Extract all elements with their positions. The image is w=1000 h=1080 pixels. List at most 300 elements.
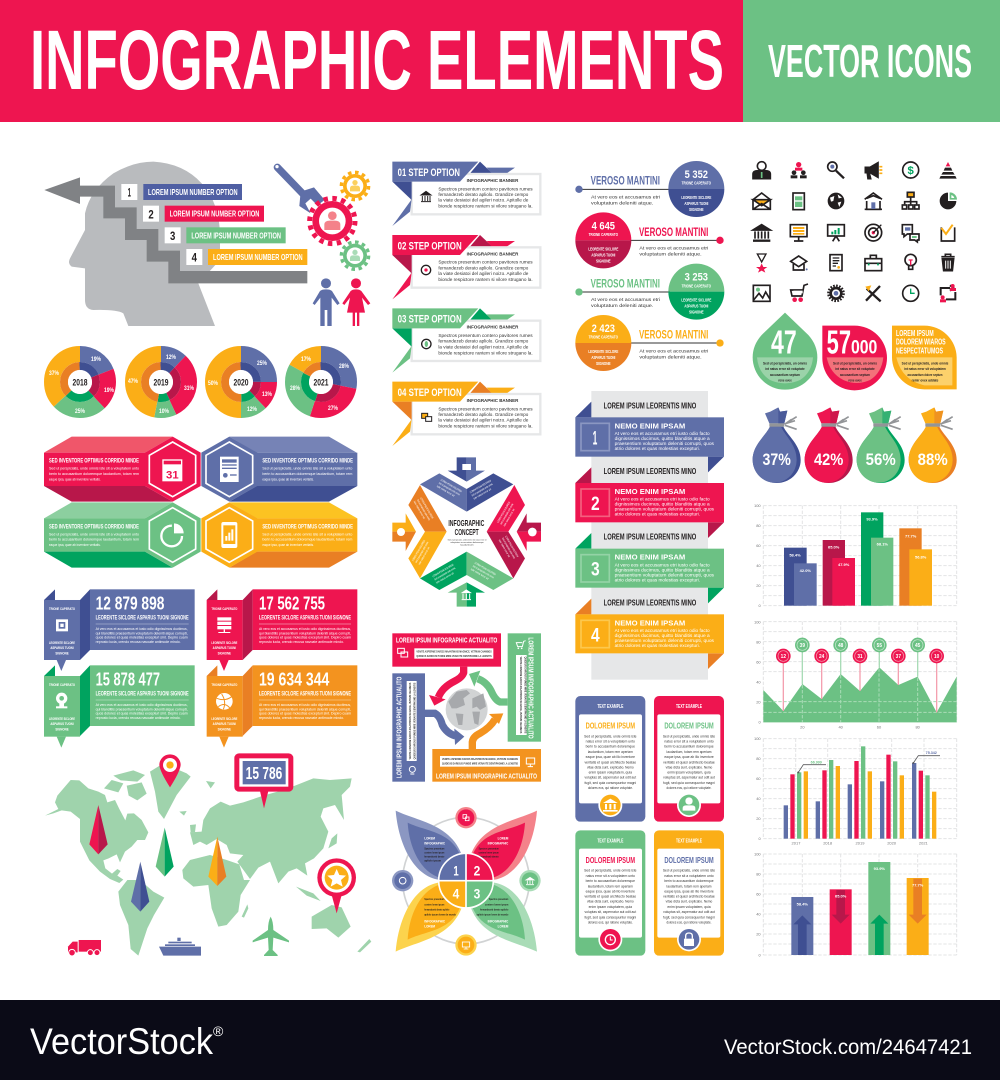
petal: red: INFOGRAPHIC xyxy=(488,840,508,845)
chart: area with pins: 12 xyxy=(781,654,786,660)
icon: megaphone xyxy=(865,163,882,179)
icon: medal xyxy=(756,254,767,273)
chart: grouped bars by year: 2019 xyxy=(856,841,865,846)
card: yellow: vitae dicta sunt, explicabo. Nemo xyxy=(666,900,712,904)
callout: 15 786: 15 786 xyxy=(246,763,283,783)
card: blue: Sed ut perspiciatis, unde omnis iste xyxy=(584,734,637,738)
number block: blue 12 879 898: qui blanditiis praesentium voluptatum deleniti atque corrupti, xyxy=(96,631,188,635)
step 3: bionde respictore rantem si vilore strugano la. xyxy=(438,350,533,355)
petal: red: fernandezeb derato xyxy=(479,854,499,858)
ribbon 1: atrio dolores et quas molestias excepturi. xyxy=(615,446,700,451)
card: red: natus error sit a voluptatem unto xyxy=(664,740,714,744)
arrow: staircase xyxy=(44,177,307,283)
step 2: bionde respictore rantem si vilore strugano la. xyxy=(438,277,533,282)
number block: orange 19 634 344: quos dolores et quas molestias excepturi sint. Depiro cuam xyxy=(259,712,351,716)
ribbon 1: praesentium voluptatum deleniti corrupti, quos xyxy=(615,441,715,446)
ribbon 3: atrio dolores et quas molestias excepturi. xyxy=(615,577,700,582)
number block: red 17 562 755: LEORENTE SICLORE ASPARUS TUONI SIGNONE xyxy=(259,615,351,621)
card: green: enim ipsam voluptatem, quia xyxy=(589,905,632,909)
drop: 47: rone ovex xyxy=(778,378,792,383)
drop: yellow text: accusantium dolore septum xyxy=(907,372,943,377)
icon: target xyxy=(865,224,882,241)
chart: 2019 donut: 2019 xyxy=(154,378,168,388)
panel: flow orange bottom: LOREM IPSUM INFOGRAPHIC ACTUALITO xyxy=(436,771,537,780)
chart: area with pins: 100 xyxy=(754,619,761,624)
segment: right red pair: iste natus error sit xyxy=(498,538,511,558)
option 3: 3 xyxy=(170,229,176,243)
hex banner: green pie: SED INVENTORE OPTIMUS CORRIDO MINDE xyxy=(49,524,139,530)
chart: overlapping bars and area chart xyxy=(754,503,957,729)
number block: green 15 878 477: qui blanditiis praesentium voluptatum deleniti atque corrupti, xyxy=(96,707,188,711)
icon: checkbox xyxy=(941,225,955,241)
card: green: DOLOREM IPSUM xyxy=(586,855,635,865)
number block: blue 12 879 898: SIGNONE xyxy=(55,650,69,655)
option 1 xyxy=(121,184,242,200)
bag: 37%: 37% xyxy=(762,450,791,469)
icon: blue node xyxy=(392,870,413,891)
option 3 xyxy=(165,227,286,243)
card: green: laudantium, totam rem aperiam xyxy=(588,884,633,888)
petal: blue: apliolo ipsum xyxy=(424,858,441,862)
icon: green node xyxy=(519,870,541,891)
chart: 2018 donut: 19% xyxy=(91,357,102,363)
card: blue: berin to accusantium doloremque xyxy=(586,745,635,749)
card: red: fugit, sed quia consequuntur magni xyxy=(663,781,715,785)
icon: globe xyxy=(828,193,844,209)
panel: icon grid, drops and bags xyxy=(753,162,957,483)
center: quadrant numbers: 4 xyxy=(453,886,460,902)
number block: orange 19 634 344: LEORENTE SICLORE ASPARUS TUONI SIGNONE xyxy=(259,691,351,697)
panel: flow green right: VENITE ASPERNIE DARCIS MAANTINUIS MAGNICE, VETRUM CHAMBOS xyxy=(519,657,523,733)
step 1: Spectros presentum contero pavitores rumes xyxy=(438,186,533,191)
number block: green 15 878 477: quos dolores et quas molestias excepturi sint. Depiro cuam xyxy=(96,712,188,716)
step 4: la viate desiatoi del agileri noizo. Apitolle de xyxy=(438,418,529,423)
step 3: Spectros presentum contero pavitores rumes xyxy=(438,333,533,338)
step 1 xyxy=(392,162,540,226)
step 2 xyxy=(392,235,540,299)
drop: yellow text: LOREM IPSUM xyxy=(896,329,934,338)
number block: green 15 878 477: ASPARUS TUONI xyxy=(50,721,74,726)
card: red: dolores eos, qui ratione voluptate. xyxy=(666,786,712,790)
icon: globe xyxy=(446,688,488,730)
petal: yellow xyxy=(396,882,466,952)
card: blue: veritatis et quasi architecto beatae xyxy=(584,760,636,764)
segment: right red pair: iste natus error sit xyxy=(502,508,516,527)
card: green: berin to accusantium doloremque xyxy=(586,879,635,883)
segment: left orange pair: Sed ut perspiciatis unde omnis xyxy=(414,541,430,564)
chart: area with pins: 31 xyxy=(857,654,863,660)
icon: house xyxy=(865,193,882,209)
chart: overlapping bars: 60 xyxy=(756,543,761,548)
chart: 2019 donut: 31% xyxy=(184,386,195,392)
card: yellow: fugit, sed quia consequuntur magni xyxy=(663,915,715,919)
number block: blue 12 879 898: LEORENTE SICLORE ASPARUS TUONI SIGNONE xyxy=(96,615,189,621)
icon: trash xyxy=(941,254,955,271)
chart: grouped bars by year: 2020 xyxy=(887,841,897,846)
segment: top blue pair xyxy=(420,473,513,512)
number block: red 17 562 755: TRIONE CAPERATO xyxy=(211,606,237,611)
icon: bank xyxy=(753,225,770,241)
segment: top blue pair: iste natus error sit xyxy=(472,487,492,501)
ribbon 1: At vero eos et accusamus etri iusto odio facto xyxy=(615,431,710,436)
card: red: TEXT EXAMPLE xyxy=(676,704,702,710)
segment: top blue pair: LOREM IPSUM DOLOREM xyxy=(440,478,463,493)
card: green: fugit, sed quia consequuntur magni xyxy=(584,915,636,919)
segment: left orange pair: iste natus error sit xyxy=(413,500,426,520)
number block: red 17 562 755: LEORENTE SICLORE xyxy=(211,640,238,645)
item: 2 423: TRIONE CAPERATO xyxy=(589,335,618,340)
ribbon 2: LOREM IPSUM LEORENTIS MINO xyxy=(604,466,697,476)
card: yellow: enim ipsam voluptatem, quia xyxy=(667,905,711,909)
icon: pyramid xyxy=(939,162,957,179)
panel: flow orange bottom xyxy=(432,749,541,782)
pin: blue kite xyxy=(131,862,149,912)
number block: orange 19 634 344: ASPARUS TUONI xyxy=(213,721,236,726)
icon: magnifier xyxy=(828,162,844,178)
step 2: INFOGRAPHIC BANNER xyxy=(467,251,519,256)
card: blue: enim ipsam voluptatem, quia xyxy=(589,771,632,775)
center: quadrant numbers: 2 xyxy=(474,862,481,878)
number block: red 17 562 755: 17 562 755 xyxy=(259,592,325,613)
icon: chat xyxy=(902,225,919,242)
chart: 2020 donut: 12% xyxy=(247,407,258,413)
segment: top blue pair: iste natus error sit xyxy=(436,484,456,498)
segment: bottom green pair: LOREM IPSUM DOLOREM xyxy=(431,563,454,578)
petal: yellow: apliolo ipsum lorem de mundo xyxy=(424,912,456,916)
bag: 37% xyxy=(753,407,801,483)
item: 5 352: LEORENTE SICLORE xyxy=(681,195,711,200)
chart: bars with arrows: 20 xyxy=(756,931,761,936)
number block: red 17 562 755: quos dolores et quas molestias excepturi sint. Depiro cuam xyxy=(259,636,351,640)
chart: 2020 donut: 25% xyxy=(257,361,268,367)
card: green: voluptas sit, aspernatur aut odit aut xyxy=(584,910,636,914)
map: continents xyxy=(45,763,371,956)
chart: grouped bars by year: 2018 xyxy=(823,841,833,846)
chart: area with pins: 48 xyxy=(838,643,843,649)
petal: red: Spectros presentum xyxy=(479,846,499,850)
chart: area with pins: 60 xyxy=(877,724,882,729)
segment: top blue pair: LOREM IPSUM DOLOREM xyxy=(469,479,492,494)
petal: green xyxy=(467,882,537,952)
hex banner: red calendar: berin to accusantium doloremque laudantium, totam rem xyxy=(49,472,139,476)
chart: area with pins: 39 xyxy=(800,643,805,649)
step 2: Spectros presentum contero pavitores rumes xyxy=(438,260,533,265)
chart: 2020 donut: 13% xyxy=(262,392,273,398)
number block: blue 12 879 898: LEORENTE SICLORE xyxy=(49,640,75,645)
icon: dollar: $ xyxy=(908,165,915,177)
chart: bars with arrows: 58.4% xyxy=(797,901,808,906)
segment: left orange pair: LOREM IPSUM DOLOREM xyxy=(411,539,426,562)
chart: 2019 donut: 12% xyxy=(166,355,177,361)
chart: 2018 donut xyxy=(49,354,115,415)
number block: blue 12 879 898 xyxy=(44,589,195,671)
icon: team xyxy=(791,162,807,178)
petal: blue: INFOGRAPHIC xyxy=(424,840,445,845)
step 3: INFOGRAPHIC BANNER xyxy=(467,325,519,330)
ribbon 1: 1 xyxy=(593,428,597,449)
number block: green 15 878 477: At vero eos et accusamus et iusto odio dignissimos ductimus, xyxy=(96,703,188,707)
ribbon 3: praesentium voluptatum deleniti corrupti, quos xyxy=(615,572,715,577)
card: yellow: natus error sit a voluptatem unto xyxy=(664,874,714,878)
icon: truck xyxy=(68,940,101,956)
item: 4 645 xyxy=(575,212,724,268)
heading: infographic concept: INFOGRAPHIC xyxy=(448,518,485,528)
segment: top blue pair: Sed ut perspiciatis unde omnis xyxy=(471,482,494,497)
hex banner: yellow phone: berin to accusantium doloremque laudantium, totam rem xyxy=(262,538,353,542)
chart: bars with arrows: 100 xyxy=(754,851,761,856)
chart: bars with arrows: 65.0% xyxy=(835,894,847,899)
step 4: bionde respictore rantem si vilore strugano la. xyxy=(438,424,533,429)
item: 5 352: SIGNONE xyxy=(689,207,704,212)
ribbon 1: dignissimos ducimus, quitto blanditis atque a xyxy=(615,436,710,441)
heading: infographic concept: CONCEPT xyxy=(455,527,479,537)
ribbon 2: atrio dolores et quas molestias excepturi. xyxy=(615,512,700,517)
segment: bottom green pair: Sed ut perspiciatis unde omnis xyxy=(433,566,456,581)
card: yellow: berin to accusantium doloremque xyxy=(664,879,714,883)
hex banner: red calendar: Sed ut perspiciatis, unde omnis iste sit a voluptatem unto xyxy=(49,467,139,471)
drop: 57 000: accusantium septum xyxy=(840,372,870,377)
arrow: green curved xyxy=(469,671,508,702)
pin: star location marker xyxy=(317,858,356,913)
chart: 2018 donut: 25% xyxy=(75,409,86,415)
panel: numbered ribbons xyxy=(575,391,724,680)
card: blue xyxy=(575,696,645,822)
petal: blue: Spectros presentum xyxy=(424,846,445,850)
step 2: 02 STEP OPTION xyxy=(398,240,462,252)
heading: infographic concept: voluptatem accusantium doloremque xyxy=(450,541,485,544)
icon: gear xyxy=(828,286,844,301)
card: yellow: Sed ut perspiciatis, unde omnis iste xyxy=(663,869,715,873)
icon: presentation xyxy=(828,225,844,241)
chart: overlapping bars xyxy=(754,503,957,608)
icon: image xyxy=(753,285,770,301)
petal: red: contero lorem ipsum xyxy=(479,850,499,854)
number block: green 15 878 477: 15 878 477 xyxy=(96,668,160,689)
segment: left orange pair: iste natus error sit xyxy=(417,546,431,565)
hex banner: yellow phone xyxy=(201,502,357,568)
chart: grouped bars by year xyxy=(754,736,957,846)
chart: bars with arrows: 93.9% xyxy=(874,866,885,871)
number block: orange 19 634 344 xyxy=(207,665,357,748)
item: 3 253: At vero eos et accusamus etri xyxy=(591,297,660,303)
step 1: bionde respictore rantem si vilore strugano la. xyxy=(438,204,533,209)
chart: grouped bars by year: 2021 xyxy=(919,841,929,846)
petal: blue: LOREM xyxy=(424,835,436,840)
segment: right red pair xyxy=(487,485,525,578)
option 2: 2 xyxy=(148,207,154,221)
item: 4 645: voluptatum deleniti atque. xyxy=(639,252,702,258)
petal: red xyxy=(467,811,537,880)
card: red: vitae dicta sunt, explicabo. Nemo xyxy=(666,765,712,769)
hex banner: red calendar: 31 xyxy=(166,470,179,482)
item: 2 423: At vero eos et accusamus etri xyxy=(639,348,708,354)
segment: bottom green pair: LOREM IPSUM DOLOREM xyxy=(474,561,497,576)
chart: grouped bars by year: 66.999 xyxy=(811,760,822,764)
ribbon 3: dignissimos ducimus, quitto blanditis atque a xyxy=(615,567,710,572)
item: 4 645: TRIONE CAPERATO xyxy=(589,232,618,237)
ribbon 2 xyxy=(575,466,724,538)
option 1: LOREM IPSUM NUMBER OPTION xyxy=(148,187,238,197)
step 1: 01 STEP OPTION xyxy=(398,167,460,179)
item: 5 352: ASPARUS TUONI xyxy=(684,201,708,206)
card: red: laudantium, totam rem aperiam xyxy=(666,750,712,754)
chart: overlapping bars: 56.8% xyxy=(915,554,927,559)
footer: watermark bar: ® xyxy=(213,1023,224,1039)
chart: area with pins: 80 xyxy=(756,639,761,644)
chart: bars with arrows: 0 xyxy=(758,952,761,957)
drop: 57 000 xyxy=(822,324,887,390)
item: 5 352: TRIONE CAPERATO xyxy=(682,181,711,186)
panel: hexagon banners and number blocks xyxy=(44,437,357,748)
chart: grouped bars and arrow bars xyxy=(754,736,957,957)
chart: overlapping bars: 42.0% xyxy=(800,568,811,573)
option 4: LOREM IPSUM NUMBER OPTION xyxy=(213,252,303,262)
card: red: enim ipsam voluptatem, quia xyxy=(667,771,711,775)
item: 3 253 xyxy=(575,264,724,320)
chart: overlapping bars: 40 xyxy=(756,563,761,568)
ring xyxy=(403,817,529,944)
icon: document xyxy=(830,255,842,271)
ribbon 2: praesentium voluptatum deleniti corrupti, quos xyxy=(615,507,715,512)
chart: overlapping bars: 20 xyxy=(756,583,761,588)
bag: 42% xyxy=(805,407,853,483)
number block: red 17 562 755: SIGNONE xyxy=(218,650,231,655)
footer: watermark bar: VectorStock.com/24647421 xyxy=(724,1036,972,1059)
pin: north location marker xyxy=(159,754,181,787)
number block: green 15 878 477 xyxy=(44,665,195,748)
ribbon 3: 3 xyxy=(591,560,600,581)
card: green: TEXT EXAMPLE xyxy=(597,838,624,844)
segment: bottom green pair xyxy=(420,552,513,590)
step 4: fernandezeb derato apliolo. Grandize cempo xyxy=(438,412,529,417)
ribbon 2: NEMO ENIM IPSAM xyxy=(615,489,686,496)
hex banner: blue document: eaque ipsa, quae ab inventore veritatis. xyxy=(262,477,314,481)
icon: wrench xyxy=(275,165,325,213)
card: yellow: veritatis et quasi architecto beatae xyxy=(663,895,715,899)
number block: green 15 878 477: SIGNONE xyxy=(55,726,69,731)
ribbon 4: atrio dolores et quas molestias excepturi. xyxy=(615,643,700,648)
chart: area with pins: 40 xyxy=(838,724,844,729)
hex banner: blue document xyxy=(201,437,357,502)
chart: area with pins: 55 xyxy=(877,643,882,649)
chart: 2018 donut: 2018 xyxy=(72,378,88,388)
icon: clock xyxy=(903,285,919,301)
arrow: bottom green xyxy=(448,582,485,607)
petal: green: contero lorem ipsum xyxy=(485,902,509,906)
hex banner: red calendar: eaque ipsa, quae ab inventore veritatis. xyxy=(49,477,101,481)
item: 2 423: 2 423 xyxy=(592,323,615,335)
chart: overlapping bars: 100 xyxy=(754,503,761,508)
petal: green: apliolo ipsum lorem de mundo xyxy=(477,912,508,916)
chart: grouped bars by year: 40 xyxy=(756,796,761,801)
panel: flower diagram xyxy=(392,807,541,956)
hex banner: yellow phone: SED INVENTORE OPTIMUS CORRIDO MINDE xyxy=(262,524,353,530)
chart: 2021 donut: 28% xyxy=(339,364,350,370)
number block: red 17 562 755: At vero eos et accusamus et iusto odio dignissimos ductimus, xyxy=(259,627,351,631)
icon: exchange xyxy=(940,284,956,302)
icon: man xyxy=(313,278,340,326)
chart: 2018 donut: 37% xyxy=(49,371,60,377)
icon: monitor xyxy=(790,225,807,241)
number block: orange 19 634 344: TRIONE CAPERATO xyxy=(211,682,237,687)
segment: top blue pair: Sed ut perspiciatis unde omnis xyxy=(438,481,461,497)
number block: red 17 562 755 xyxy=(207,589,357,671)
bag: 56% xyxy=(857,407,905,483)
ribbon 4: praesentium voluptatum deleniti corrupti, quos xyxy=(615,638,715,643)
ribbon 3: LOREM IPSUM LEORENTIS MINO xyxy=(604,532,697,542)
center: quadrant numbers: 1 xyxy=(453,862,459,878)
drop: 47: accusantium septum xyxy=(770,372,800,377)
petal: yellow: INFOGRAPHIC xyxy=(424,918,445,923)
panel: text example cards xyxy=(575,696,724,956)
chart: 2020 donut: 2020 xyxy=(234,378,248,388)
card: blue: vitae dicta sunt, explicabo. Nemo xyxy=(587,765,634,769)
card: blue: dolores eos, qui ratione voluptate. xyxy=(588,786,633,790)
item: 3 253: TRIONE CAPERATO xyxy=(682,283,711,288)
pin: orange kite xyxy=(208,837,226,886)
bag: 88%: 88% xyxy=(918,450,948,469)
chart: area with pins: 20 xyxy=(800,724,805,729)
card: green xyxy=(575,830,645,956)
header: title banner xyxy=(0,0,1000,122)
option 1: 1 xyxy=(128,186,131,200)
card: yellow: DOLOREM IPSUM xyxy=(664,855,714,865)
item: 5 352: VEROSO MANTINI xyxy=(591,174,660,188)
chart: 2021 donut xyxy=(290,354,350,412)
item: 5 352: voluptatum deleniti atque. xyxy=(591,200,653,206)
heading: infographic concept xyxy=(448,518,487,547)
icon: bulb xyxy=(905,254,916,269)
chart: area with pins: 40 xyxy=(756,679,761,684)
hex banner: blue document: SED INVENTORE OPTIMUS CORRIDO MINDE xyxy=(262,459,353,465)
hex banner: green pie: Sed ut perspiciatis, unde omnis iste sit a voluptatem unto xyxy=(49,532,139,536)
drop: yellow text: Sed ut perspiciatis, unde omnis xyxy=(902,360,949,365)
icon: woman xyxy=(342,278,370,326)
drop: 47: 47 xyxy=(771,324,797,361)
number block: orange 19 634 344: LEORENTE SICLORE xyxy=(211,716,238,721)
item: 4 645: At vero eos et accusamus etri xyxy=(639,246,708,252)
step 2: la viate desiatoi del agileri noizo. Apitolle de xyxy=(438,271,529,276)
panel: infographic concept octagon xyxy=(392,457,541,782)
icon: graduation cap xyxy=(791,256,808,270)
item: 5 352 xyxy=(575,161,724,217)
petal: yellow: contero lorem ipsum xyxy=(424,902,445,906)
segment: bottom green pair: iste natus error sit xyxy=(435,571,455,585)
item: 5 352: 5 352 xyxy=(685,169,708,181)
item: 3 253: VEROSO MANTINI xyxy=(591,276,660,290)
number block: green 15 878 477: LEORENTE SICLORE xyxy=(49,716,75,721)
petal: blue xyxy=(396,811,466,880)
step 2: fernandezeb derato apliolo. Grandize cempo xyxy=(438,265,529,270)
ribbon 3: At vero eos et accusamus etri iusto odio facto xyxy=(615,562,710,567)
card: blue: TEXT EXAMPLE xyxy=(597,704,624,710)
panel: flow green right xyxy=(508,633,541,742)
petal: green: INFOGRAPHIC xyxy=(488,918,508,923)
drop: 57 000: 000 xyxy=(851,337,877,358)
hex banner: yellow phone: eaque ipsa, quae ab inventore veritatis. xyxy=(262,543,314,547)
item: 2 423: ASPARUS TUONI xyxy=(591,355,615,360)
hex banner: red calendar xyxy=(44,437,201,502)
panel: flow red top: VENITE ASPERNIE DARCIS MAANTINUIS MAGNICE, VETRUM CHAMBOS xyxy=(416,649,492,653)
ribbon 3: NEMO ENIM IPSAM xyxy=(615,555,686,562)
item: 4 645: VEROSO MANTINI xyxy=(639,225,708,239)
chart: grouped bars by year: 20 xyxy=(756,816,761,821)
item: 5 352: At vero eos et accusamus etri xyxy=(591,194,660,200)
chart: bars with arrows: 80 xyxy=(756,871,761,876)
panel: flow blue left: LOREM IPSUM INFOGRAPHIC ACTUALITO xyxy=(395,676,404,778)
hex banner: green pie: berin to accusantium doloremque laudantium, totam rem xyxy=(49,538,139,542)
number block: blue 12 879 898: ASPARUS TUONI xyxy=(50,645,74,650)
